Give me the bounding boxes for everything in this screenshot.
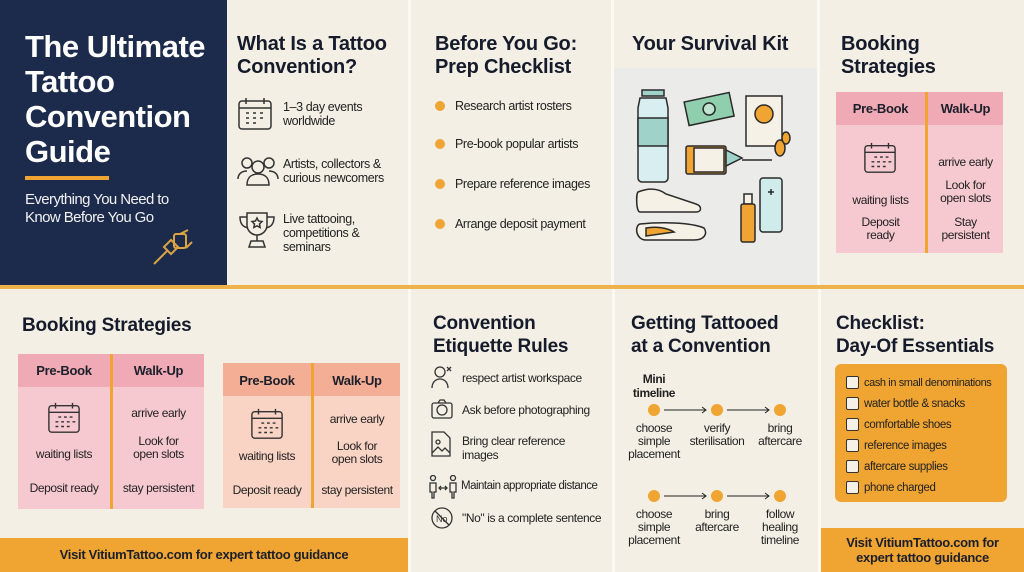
table: pre-book vs walk-up: Stay — [954, 215, 977, 229]
timeline 2 — [628, 490, 799, 547]
title: The Ultimate Tattoo Convention Guide — [25, 29, 205, 169]
panel: what is — [237, 33, 387, 254]
table: salmon: Walk-Up — [332, 373, 382, 388]
heading: Strategies — [841, 56, 936, 78]
table: salmon — [223, 363, 400, 508]
table: salmon: Pre-Book — [239, 373, 295, 388]
panel: survival kit — [632, 33, 791, 243]
subtitle: Know Before You Go — [25, 209, 153, 226]
rule list: "No" is a complete sentence — [462, 511, 601, 525]
bullet list — [435, 99, 590, 231]
table: pink: open slots — [133, 447, 184, 461]
timeline 1: choose — [636, 421, 672, 435]
rule list: Ask before photographing — [462, 403, 590, 417]
item: calendar: 1–3 day events — [283, 100, 362, 114]
heading: Your Survival Kit — [632, 33, 788, 55]
timeline 1: simple — [638, 434, 670, 448]
item: people: Artists, collectors & — [283, 157, 381, 171]
heading — [433, 313, 568, 357]
orange horizontal divider — [0, 285, 1024, 289]
timeline 1: verify — [704, 421, 730, 435]
timeline 2: aftercare — [695, 520, 739, 534]
timeline 2: bring — [705, 507, 729, 521]
heading: Prep Checklist — [435, 56, 571, 78]
item: people: curious newcomers — [283, 171, 384, 185]
heading: Convention — [433, 313, 536, 334]
bullet list: Prepare reference images — [455, 177, 590, 191]
timeline 1: sterilisation — [690, 434, 744, 448]
footer: left: Visit VitiumTattoo.com for expert tattoo guidance — [60, 547, 348, 562]
timeline 1: aftercare — [758, 434, 802, 448]
panel: day-of checklist — [821, 313, 1024, 572]
heading: Checklist: — [836, 313, 925, 334]
heading: Booking Strategies — [22, 315, 192, 336]
table: pre-book vs walk-up: persistent — [941, 228, 990, 242]
subtitle — [25, 191, 169, 226]
table: pink — [18, 354, 204, 509]
timeline 2: healing — [762, 520, 798, 534]
underline accent — [25, 176, 109, 180]
item: calendar: worldwide — [283, 114, 335, 128]
checklist box — [835, 364, 1007, 502]
table: salmon: Deposit ready — [233, 483, 301, 497]
footer: right: Visit VitiumTattoo.com for — [846, 535, 999, 550]
item: trophy: seminars — [283, 240, 331, 254]
table: pre-book vs walk-up: Walk-Up — [941, 101, 990, 116]
illustration: kit items — [636, 89, 791, 243]
checklist box: comfortable shoes — [864, 419, 951, 431]
label: mini timeline: Mini — [643, 372, 665, 386]
table: pink: stay persistent — [123, 481, 194, 495]
rule list — [429, 366, 601, 529]
timeline 1 — [628, 404, 802, 461]
label: mini timeline — [633, 372, 675, 400]
table: pink: arrive early — [131, 406, 186, 420]
heading — [841, 33, 936, 78]
rule list: Bring clear reference — [462, 434, 565, 448]
table: pink: Walk-Up — [134, 363, 183, 378]
heading: Day-Of Essentials — [836, 336, 994, 357]
heading — [631, 313, 778, 357]
panel: title — [0, 0, 227, 285]
footer: right: expert tattoo guidance — [856, 550, 989, 565]
heading: Before You Go: — [435, 33, 577, 55]
table: pre-book vs walk-up — [836, 92, 1003, 253]
footer: right — [821, 528, 1024, 572]
table: pre-book vs walk-up: Pre-Book — [853, 101, 908, 116]
rule list: respect artist workspace — [462, 371, 582, 385]
item: trophy — [239, 212, 360, 254]
checklist box: cash in small denominations — [864, 377, 991, 389]
footer: left — [0, 538, 408, 572]
checklist box: reference images — [864, 440, 946, 452]
checklist box: aftercare supplies — [864, 461, 948, 473]
table: pink: waiting lists — [36, 447, 92, 461]
table: salmon: arrive early — [330, 412, 384, 426]
bullet list: Arrange deposit payment — [455, 217, 585, 231]
table: salmon: open slots — [332, 452, 382, 466]
timeline 1: placement — [628, 447, 680, 461]
rule list: Maintain appropriate distance — [461, 480, 597, 492]
heading: What Is a Tattoo Convention? — [237, 33, 387, 78]
checklist box: water bottle & snacks — [864, 398, 965, 410]
table: pre-book vs walk-up: waiting lists — [852, 193, 909, 207]
timeline 2: placement — [628, 533, 680, 547]
timeline 2: timeline — [761, 533, 799, 547]
heading: at a Convention — [631, 336, 771, 357]
checklist box: phone charged — [864, 482, 936, 494]
table: pre-book vs walk-up: arrive early — [938, 155, 993, 169]
panel: booking strategies bottom — [0, 315, 408, 572]
item: calendar — [238, 98, 362, 130]
table: pre-book vs walk-up: ready — [866, 228, 895, 242]
heading — [836, 313, 994, 357]
table: pink: Look for — [138, 434, 179, 448]
panel: booking strategies top — [836, 33, 1003, 253]
rule list: images — [462, 448, 498, 462]
heading: Etiquette Rules — [433, 336, 568, 357]
icon: tattoo machine — [153, 229, 193, 265]
item: trophy: competitions & — [283, 226, 359, 240]
timeline 2: simple — [638, 520, 670, 534]
item: trophy: Live tattooing, — [283, 212, 355, 226]
timeline 2: follow — [766, 507, 794, 521]
panel: getting tattooed — [628, 313, 802, 547]
table: pre-book vs walk-up: Deposit — [862, 215, 899, 229]
table: salmon: Look for — [337, 439, 377, 453]
table: pre-book vs walk-up: Look for — [945, 178, 986, 192]
label: mini timeline: timeline — [633, 386, 675, 400]
table: salmon: stay persistent — [321, 483, 393, 497]
bullet list: Research artist rosters — [455, 99, 572, 113]
heading: Booking — [841, 33, 920, 55]
subtitle: Everything You Need to — [25, 191, 169, 208]
rule list: No — [436, 514, 448, 524]
timeline 2: choose — [636, 507, 672, 521]
table: pink: Pre-Book — [36, 363, 92, 378]
bullet list: Pre-book popular artists — [455, 137, 578, 151]
panel: prep checklist — [435, 33, 590, 231]
table: salmon: waiting lists — [239, 449, 295, 463]
heading: Getting Tattooed — [631, 313, 778, 334]
panel: etiquette — [429, 313, 601, 529]
heading — [435, 33, 577, 78]
item: people — [237, 157, 384, 186]
table: pink: Deposit ready — [30, 481, 98, 495]
timeline 1: bring — [768, 421, 792, 435]
table: pre-book vs walk-up: open slots — [940, 191, 991, 205]
